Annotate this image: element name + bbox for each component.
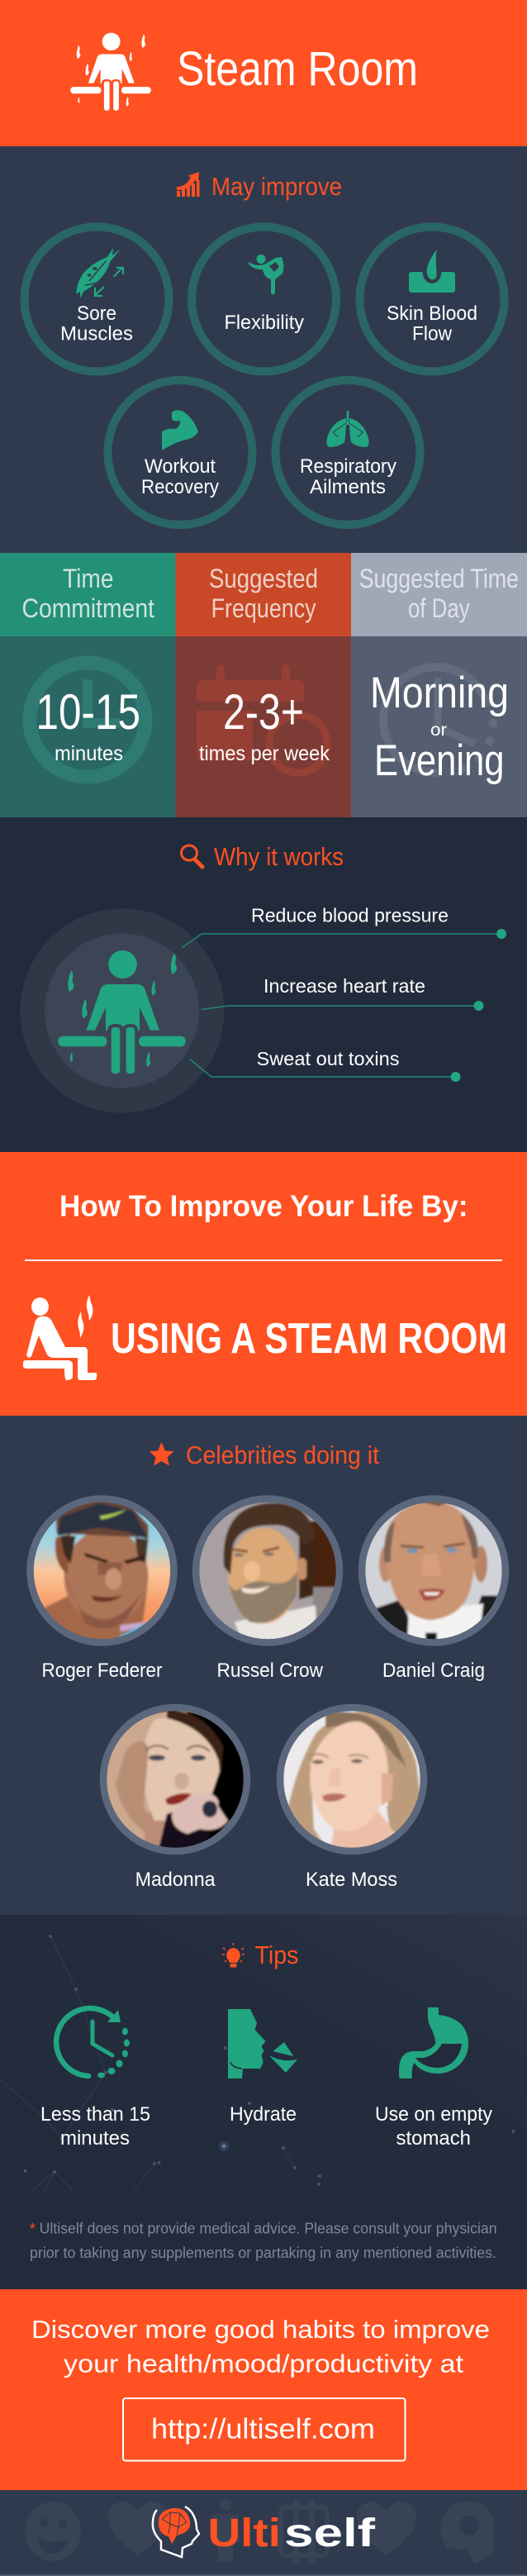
name: Daniel Craig: Daniel Craig	[382, 1659, 485, 1682]
logo: ultiself: self	[284, 2512, 376, 2555]
icon: circular clock watermark	[383, 667, 497, 773]
callout: increase heart rate	[202, 975, 484, 1011]
callout: sweat out toxins	[190, 1048, 461, 1082]
item: respiratory ailments: Ailments	[310, 476, 386, 498]
button: url: http://ultiself.com	[151, 2414, 375, 2445]
watermark icons	[25, 2499, 494, 2564]
item: skin blood flow: Skin Blood	[387, 302, 477, 325]
text: discover more: Discover more good habits to improve	[31, 2315, 490, 2344]
callout: sweat out toxins: Sweat out toxins	[256, 1048, 400, 1069]
portrait: Kate Moss	[280, 1707, 424, 1851]
panel: suggested frequency	[175, 553, 351, 817]
item: skin blood flow: Flow	[412, 322, 453, 345]
panel: suggested time of day: Morning	[370, 669, 509, 717]
title: Steam Room	[177, 42, 418, 96]
panel: time commitment	[0, 553, 175, 817]
item: workout recovery: Recovery	[141, 476, 219, 498]
panel: suggested frequency: Frequency	[211, 593, 316, 623]
panel: call to action: your health/mood/productivity at	[64, 2350, 463, 2378]
heading: celebrities doing it: Celebrities doing it	[186, 1440, 379, 1469]
button: url	[123, 2398, 405, 2461]
icon: magnifier	[182, 845, 202, 867]
panel: may improve	[0, 146, 527, 553]
panel: time commitment: 10-15	[36, 684, 140, 740]
panel: celebrities	[26, 1442, 509, 1886]
panel: why it works	[0, 817, 527, 1152]
panel: suggested frequency: times per week	[199, 742, 330, 765]
icon: light bulb	[222, 1943, 245, 1967]
callout: increase heart rate: Increase heart rate	[264, 975, 425, 997]
heading: how to improve your life by: How To Improve Your Life By:	[59, 1189, 468, 1223]
heading: may improve: May improve	[211, 172, 342, 201]
tip: use on empty stomach	[375, 2007, 492, 2150]
item: sore muscles: Muscles	[60, 322, 133, 345]
tip: hydrate: Hydrate	[230, 2103, 297, 2126]
icon: seated person with steam	[23, 1295, 97, 1380]
heading: tips: Tips	[254, 1940, 299, 1969]
item: respiratory ailments: Respiratory	[300, 455, 396, 478]
icon: clock watermark	[30, 663, 145, 777]
panel: time commitment: minutes	[55, 742, 123, 765]
item: sore muscles	[25, 226, 169, 372]
disclaimer	[30, 2221, 497, 2261]
heading: why it works: Why it works	[214, 842, 344, 871]
icon: rising chart	[177, 172, 200, 197]
panel: header	[0, 0, 527, 146]
panel: time commitment: Commitment	[21, 593, 154, 623]
item: respiratory ailments	[276, 380, 420, 525]
tip: less than 15 minutes	[40, 2008, 150, 2150]
name: Roger Federer: Roger Federer	[41, 1659, 162, 1682]
name: Kate Moss: Kate Moss	[306, 1869, 397, 1891]
icon: calendar watermark	[197, 664, 304, 760]
item: flexibility: Flexibility	[225, 312, 304, 334]
name: Russel Crow: Russel Crow	[216, 1659, 324, 1682]
tip: less than 15 minutes: minutes	[60, 2127, 130, 2150]
panel: call to action	[0, 2289, 527, 2490]
item: workout recovery	[107, 380, 253, 525]
icon: person in steam room	[70, 33, 151, 111]
logo: ultiself: Ulti	[208, 2512, 281, 2555]
item: flexibility	[192, 226, 336, 372]
panel: suggested frequency: Suggested	[209, 564, 318, 593]
disclaimer: prior to taking any supplements or partaking in any mentioned activities.	[30, 2245, 496, 2261]
panel: time commitment: Time	[63, 564, 114, 593]
portrait: Roger Federer	[30, 1499, 173, 1645]
panel: how to improve banner	[0, 1152, 527, 1416]
panel: tips	[0, 1915, 527, 2289]
callout: reduce blood pressure: Reduce blood pressure	[251, 904, 449, 926]
panel: suggested time of day: of Day	[408, 593, 470, 623]
item: workout recovery: Workout	[145, 455, 216, 478]
disclaimer: *	[30, 2221, 36, 2237]
panel: footer	[0, 2490, 527, 2576]
portrait: Russel Crow	[196, 1499, 339, 1643]
logo: ultiself	[153, 2507, 376, 2557]
portrait: Daniel Craig	[362, 1499, 506, 1645]
callout: reduce blood pressure	[182, 904, 506, 948]
star field background	[0, 1935, 515, 2192]
tip: hydrate	[228, 2009, 297, 2126]
panel: suggested time of day	[351, 553, 527, 817]
item: skin blood flow	[360, 226, 504, 372]
portrait: Madonna	[103, 1707, 247, 1851]
item: sore muscles: Sore	[77, 302, 116, 325]
disclaimer: Ultiself does not provide medical advice. Please consult your physician	[40, 2221, 497, 2237]
icon: star	[150, 1442, 173, 1466]
name: Madonna: Madonna	[135, 1869, 216, 1891]
panel: suggested frequency: 2-3+	[223, 684, 304, 740]
panel: suggested time of day: or	[430, 721, 447, 740]
tip: use on empty stomach: Use on empty	[375, 2103, 492, 2126]
tip: less than 15 minutes: Less than 15	[40, 2103, 150, 2126]
tip: use on empty stomach: stomach	[396, 2127, 471, 2150]
diagram: steam room person	[20, 909, 225, 1112]
